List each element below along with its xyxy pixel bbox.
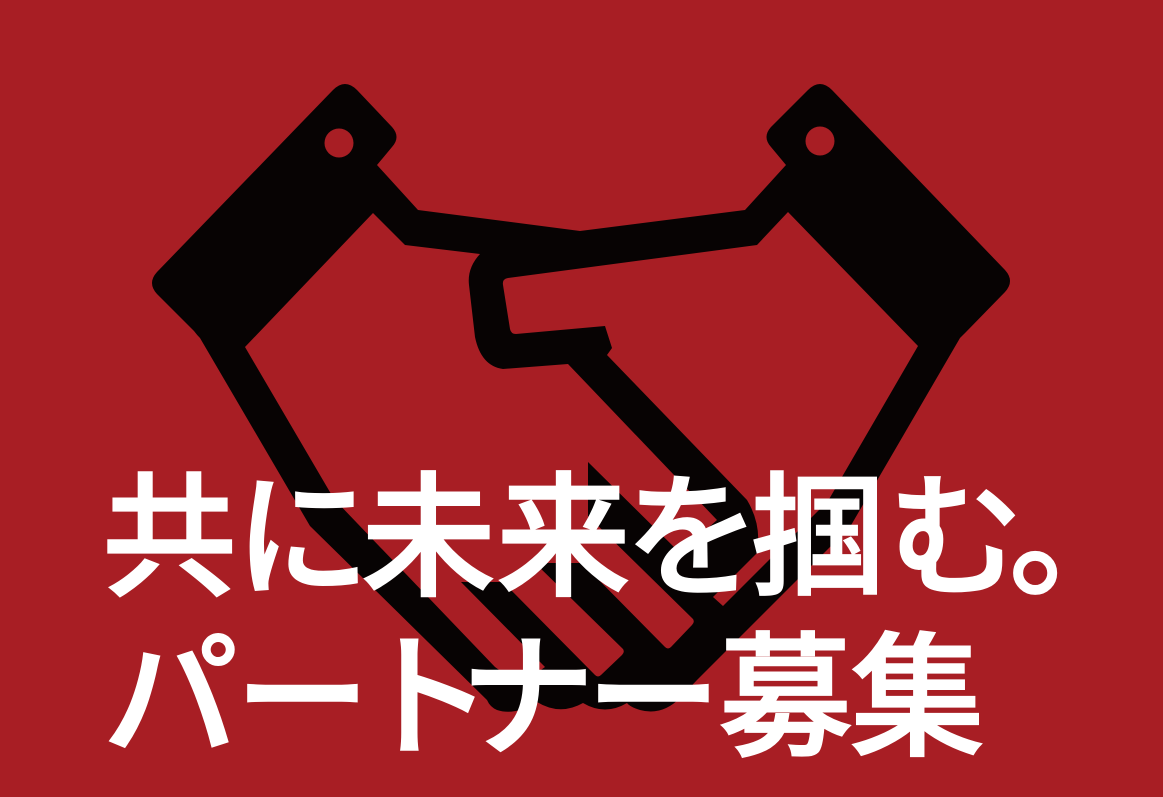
- handshake silhouette: [152, 84, 1010, 712]
- left cuff button: [324, 128, 354, 158]
- gap: right hand: [503, 212, 918, 606]
- icon: handshake: [152, 84, 1010, 712]
- right cuff button: [806, 126, 834, 156]
- gap: left hand and fingers: [245, 213, 717, 685]
- subtitle: パートナー募集: パートナー募集: [103, 623, 985, 774]
- title: 共に未来を掴む。: 共に未来を掴む。: [102, 463, 1144, 614]
